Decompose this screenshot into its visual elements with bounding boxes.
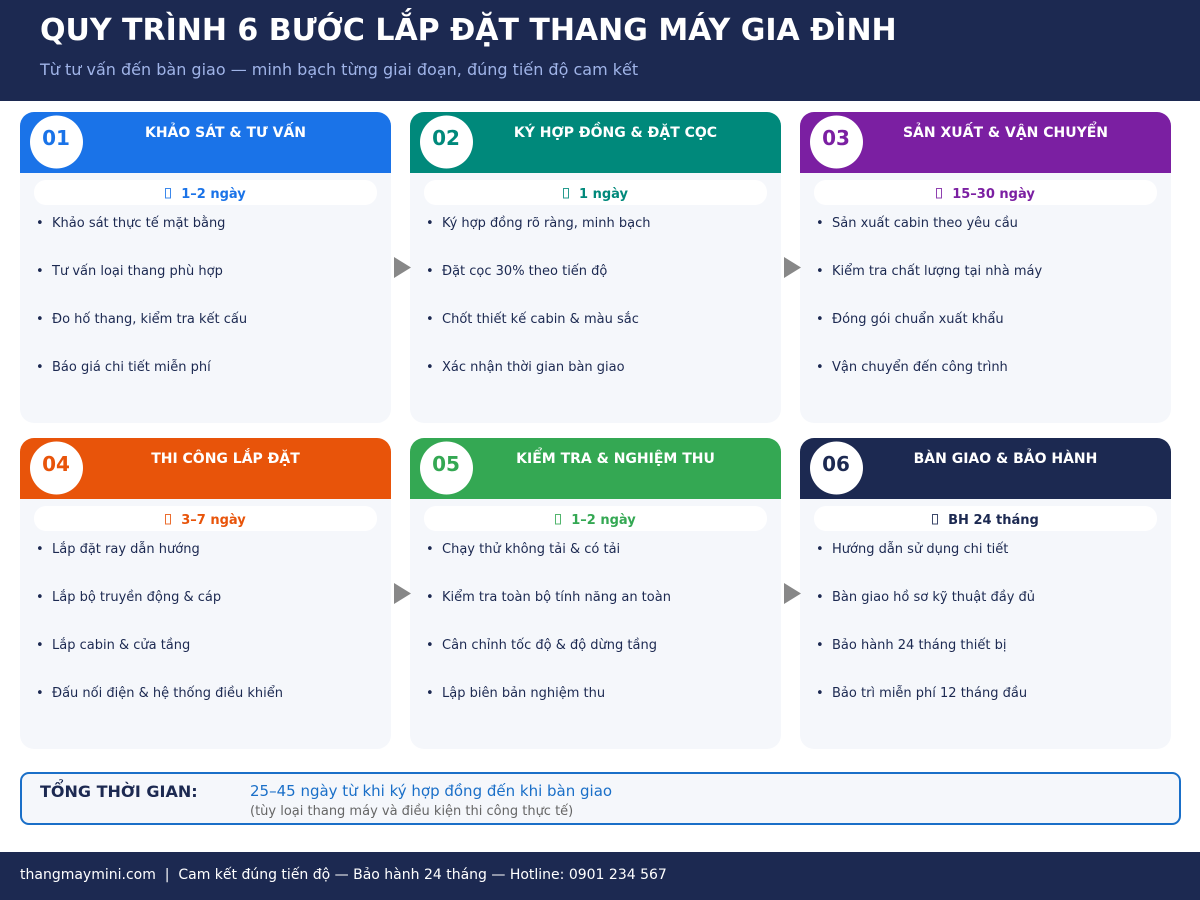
- step 01 checklist: Khảo sát thực tế mặt bằng: [52, 216, 225, 231]
- total time callout: [21, 773, 1180, 824]
- step 03 checklist: [816, 216, 1042, 375]
- step 04 checklist: [36, 542, 283, 701]
- step 05 checklist: Lập biên bản nghiệm thu: [442, 686, 605, 701]
- step 05 checklist: [426, 542, 671, 701]
- subtitle: Từ tư vấn đến bàn giao — minh bạch từng giai đoạn, đúng tiến độ cam kết: [39, 60, 638, 79]
- step 02 checklist: Đặt cọc 30% theo tiến độ: [442, 264, 607, 279]
- panel: step 04: [20, 438, 391, 749]
- header band: [0, 0, 1200, 101]
- step 01 number badge: 01: [42, 126, 70, 150]
- step 05 duration: 1–2 ngày: [571, 513, 636, 528]
- step 06 header: [800, 438, 1171, 499]
- step 04 checklist: •: [36, 590, 44, 605]
- step 06 checklist: •: [816, 686, 824, 701]
- step 04 checklist: Lắp đặt ray dẫn hướng: [52, 542, 200, 557]
- step 06 checklist: •: [816, 638, 824, 653]
- step 03 checklist: Đóng gói chuẩn xuất khẩu: [832, 312, 1004, 327]
- step 05 checklist: Chạy thử không tải & có tải: [442, 542, 620, 557]
- step 05 duration: [424, 506, 767, 531]
- panel: step 03: [800, 112, 1171, 423]
- step 01 checklist: Tư vấn loại thang phù hợp: [51, 264, 223, 279]
- total time label: TỔNG THỜI GIAN:: [40, 779, 198, 801]
- step 01 checklist: •: [36, 264, 44, 279]
- arrow: step 2 to 3: [784, 257, 801, 278]
- step 01 duration: 1–2 ngày: [181, 187, 246, 202]
- step 06 checklist: •: [816, 542, 824, 557]
- panel: step 01: [20, 112, 391, 423]
- arrow: step 4 to 5: [394, 583, 411, 604]
- step 01 checklist: •: [36, 216, 44, 231]
- step 04 number badge: [30, 442, 83, 494]
- step 01 duration: [34, 180, 377, 205]
- total time note: (tùy loại thang máy và điều kiện thi công thực tế): [250, 804, 573, 819]
- step 03 number badge: [810, 116, 863, 168]
- step 05 checklist: •: [426, 590, 434, 605]
- arrow: step 5 to 6: [784, 583, 801, 604]
- step 02 heading: KÝ HỢP ĐỒNG & ĐẶT CỌC: [514, 122, 717, 141]
- step 05 number badge: [420, 442, 473, 494]
- step 02 checklist: •: [426, 360, 434, 375]
- step 01 checklist: •: [36, 360, 44, 375]
- step 01 checklist: Đo hố thang, kiểm tra kết cấu: [52, 312, 247, 327]
- step 05 checklist: •: [426, 686, 434, 701]
- step 02 checklist: •: [426, 216, 434, 231]
- step 06 duration: [814, 506, 1157, 531]
- step 05 checklist: Kiểm tra toàn bộ tính năng an toàn: [442, 590, 671, 605]
- step 06 checklist: Bàn giao hồ sơ kỹ thuật đầy đủ: [832, 590, 1035, 605]
- step 06 checklist: •: [816, 590, 824, 605]
- step 02 number badge: [420, 116, 473, 168]
- step 03 checklist: Sản xuất cabin theo yêu cầu: [832, 216, 1018, 231]
- step 02 checklist: Ký hợp đồng rõ ràng, minh bạch: [442, 216, 651, 231]
- step 06 checklist: Hướng dẫn sử dụng chi tiết: [832, 542, 1008, 557]
- step 04 checklist: Đấu nối điện & hệ thống điều khiển: [52, 686, 283, 701]
- arrow: step 1 to 2: [394, 257, 411, 278]
- step 03 checklist: •: [816, 264, 824, 279]
- step 04 checklist: Lắp bộ truyền động & cáp: [52, 590, 221, 605]
- step 06 checklist: Bảo hành 24 tháng thiết bị: [832, 638, 1006, 653]
- step 01 checklist: [36, 216, 247, 375]
- step 01 checklist: Báo giá chi tiết miễn phí: [52, 360, 211, 375]
- step 03 duration: 15–30 ngày: [952, 187, 1035, 202]
- footer: [0, 852, 1200, 900]
- step 04 duration: [34, 506, 377, 531]
- step 03 number badge: 03: [822, 126, 850, 150]
- title: QUY TRÌNH 6 BƯỚC LẮP ĐẶT THANG MÁY GIA ĐÌNH: [40, 8, 897, 48]
- panel: step 06: [800, 438, 1171, 749]
- step 06 number badge: 06: [822, 452, 850, 476]
- step 06 duration: BH 24 tháng: [948, 513, 1039, 528]
- step 05 checklist: •: [426, 542, 434, 557]
- step 01 header: [20, 112, 391, 173]
- step 05 checklist: Cân chỉnh tốc độ & độ dừng tầng: [442, 638, 657, 653]
- step 04 number badge: 04: [42, 452, 70, 476]
- step 03 checklist: •: [816, 312, 824, 327]
- step 02 checklist: •: [426, 264, 434, 279]
- step 04 duration: 3–7 ngày: [181, 513, 246, 528]
- step 06 number badge: [810, 442, 863, 494]
- step 04 checklist: •: [36, 686, 44, 701]
- step 01 heading: KHẢO SÁT & TƯ VẤN: [145, 121, 306, 141]
- step 04 checklist: •: [36, 542, 44, 557]
- step 03 checklist: •: [816, 216, 824, 231]
- step 02 checklist: Xác nhận thời gian bàn giao: [442, 360, 625, 375]
- step 04 header: [20, 438, 391, 499]
- total time value: 25–45 ngày từ khi ký hợp đồng đến khi bàn giao: [250, 782, 612, 800]
- panel: step 02: [410, 112, 781, 423]
- step 01 checklist: •: [36, 312, 44, 327]
- step 02 number badge: 02: [432, 126, 460, 150]
- step 05 number badge: 05: [432, 452, 460, 476]
- step 02 checklist: Chốt thiết kế cabin & màu sắc: [442, 312, 639, 327]
- panel: step 05: [410, 438, 781, 749]
- step 03 checklist: •: [816, 360, 824, 375]
- step 02 header: [410, 112, 781, 173]
- step 06 checklist: [816, 542, 1035, 701]
- step 04 checklist: Lắp cabin & cửa tầng: [52, 638, 190, 653]
- step 02 duration: [424, 180, 767, 205]
- step 03 heading: SẢN XUẤT & VẬN CHUYỂN: [903, 121, 1108, 141]
- footer text: thangmaymini.com | Cam kết đúng tiến độ — Bảo hành 24 tháng — Hotline: 0901 234 567: [20, 866, 667, 883]
- step 06 heading: BÀN GIAO & BẢO HÀNH: [914, 448, 1097, 467]
- step 05 heading: KIỂM TRA & NGHIỆM THU: [516, 447, 715, 467]
- step 05 header: [410, 438, 781, 499]
- step 02 checklist: [426, 216, 651, 375]
- step 06 checklist: Bảo trì miễn phí 12 tháng đầu: [832, 686, 1027, 701]
- step 03 checklist: Vận chuyển đến công trình: [832, 360, 1008, 375]
- step 03 header: [800, 112, 1171, 173]
- step 02 duration: 1 ngày: [579, 187, 629, 202]
- step 05 checklist: •: [426, 638, 434, 653]
- step 01 number badge: [30, 116, 83, 168]
- step 03 duration: [814, 180, 1157, 205]
- step 04 checklist: •: [36, 638, 44, 653]
- step 02 checklist: •: [426, 312, 434, 327]
- step 04 heading: THI CÔNG LẮP ĐẶT: [151, 448, 300, 467]
- step 03 checklist: Kiểm tra chất lượng tại nhà máy: [832, 264, 1042, 279]
